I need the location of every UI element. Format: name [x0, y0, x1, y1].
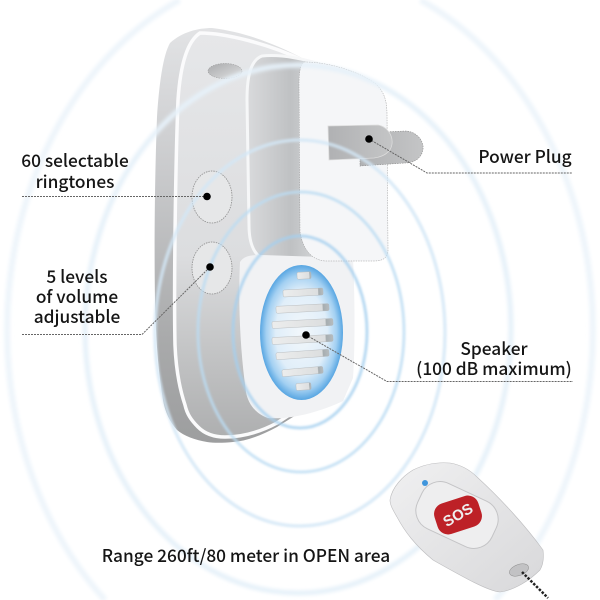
- label: 5 levels of volume adjustable: 5 levels: [46, 263, 108, 288]
- label: 5 levels of volume adjustable: adjustable: [34, 303, 121, 328]
- label: 60 selectable ringtones: ringtones: [36, 168, 114, 193]
- plug side: [247, 55, 320, 264]
- SOS button: SOS: [440, 500, 476, 531]
- remote body: [390, 463, 543, 592]
- SOS button: [431, 493, 485, 537]
- label: power plug: Power Plug: [478, 143, 572, 168]
- volume button: [192, 242, 232, 294]
- label: speaker: (100 dB maximum): [416, 355, 572, 380]
- label: speaker: Speaker: [460, 335, 529, 360]
- LED: [422, 480, 428, 486]
- body front face with white rim: [175, 33, 320, 437]
- speaker grille: [260, 265, 343, 400]
- rear plug prong: [360, 131, 423, 166]
- leader: power plug: [365, 135, 572, 173]
- plug front: [299, 62, 388, 261]
- leader: speaker: [302, 331, 573, 382]
- button surround: [409, 475, 505, 555]
- speaker housing: [239, 255, 354, 418]
- body outer shell: [155, 28, 320, 443]
- remote control: [390, 463, 548, 598]
- label: 60 selectable ringtones: 60 selectable: [21, 147, 129, 172]
- lanyard chain: [522, 572, 548, 598]
- front plug prong: [328, 125, 392, 160]
- leader: ringtones: [22, 193, 211, 200]
- lanyard hole: [508, 561, 530, 579]
- label: range: Range 260ft/80 meter in OPEN area: [102, 542, 390, 567]
- mounting hole: [208, 64, 242, 78]
- device body: [155, 28, 423, 443]
- leader: volume: [22, 263, 214, 334]
- ringtone button: [192, 171, 232, 223]
- speaker slots: [272, 272, 333, 391]
- label: 5 levels of volume adjustable: of volume: [36, 283, 118, 308]
